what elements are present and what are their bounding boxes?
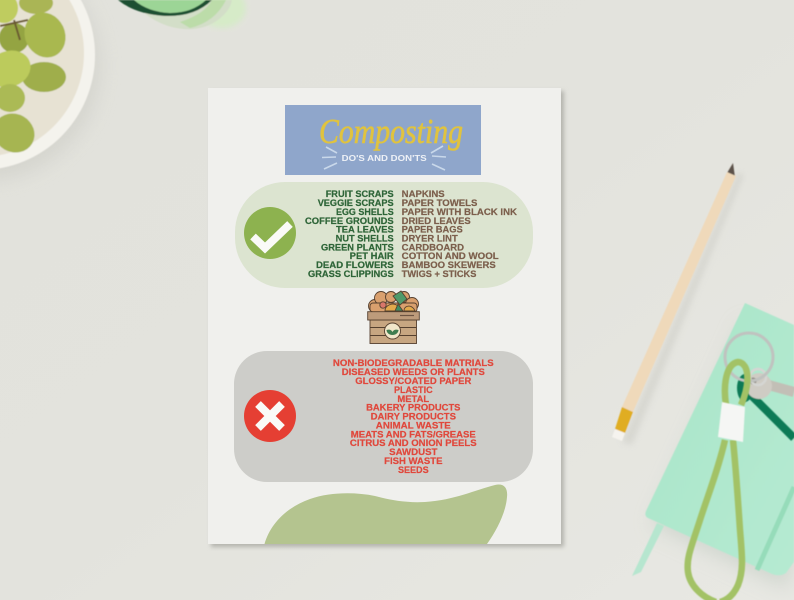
panel: compostable items xyxy=(235,182,533,288)
brown materials list: DRIED LEAVES xyxy=(402,216,471,226)
green materials list: FRUIT SCRAPS xyxy=(326,189,394,199)
red materials list: DAIRY PRODUCTS xyxy=(371,412,456,422)
sparkle lines xyxy=(322,146,446,170)
red materials list: PLASTIC xyxy=(394,385,433,395)
pencil xyxy=(612,163,744,445)
brown materials list: COTTON AND WOOL xyxy=(402,251,499,261)
brown materials list: CARDBOARD xyxy=(402,242,464,252)
red materials list: BAKERY PRODUCTS xyxy=(366,403,460,413)
green materials list: COFFEE GROUNDS xyxy=(305,216,394,226)
green materials list: DEAD FLOWERS xyxy=(316,260,394,270)
paper shadow xyxy=(211,91,564,547)
green blob decoration xyxy=(264,485,507,544)
icon: compost crate xyxy=(368,291,419,344)
paper sheet xyxy=(208,88,561,544)
icon: cross mark xyxy=(244,390,296,442)
red materials list: NON-BIODEGRADABLE MATRIALS xyxy=(333,358,494,368)
cord sleeve xyxy=(718,402,745,442)
brown materials list: TWIGS + STICKS xyxy=(402,269,476,279)
red materials list: MEATS AND FATS/GREASE xyxy=(351,429,476,439)
green materials list: GREEN PLANTS xyxy=(321,242,394,252)
green materials list: PET HAIR xyxy=(350,251,394,261)
bowl of grapes xyxy=(0,0,100,180)
green materials list: TEA LEAVES xyxy=(336,225,394,235)
red materials list: ANIMAL WASTE xyxy=(376,420,451,430)
icon: check mark xyxy=(244,207,296,259)
notebook xyxy=(632,303,794,590)
subtitle: DO'S AND DON'TS xyxy=(342,153,427,163)
panel: non-compostable items xyxy=(234,351,533,482)
header banner xyxy=(285,105,481,175)
green materials list: VEGGIE SCRAPS xyxy=(318,198,394,208)
brown materials list: PAPER WITH BLACK INK xyxy=(402,207,517,217)
green materials list: GRASS CLIPPINGS xyxy=(308,269,394,279)
brown materials list: DRYER LINT xyxy=(402,234,458,244)
brown materials list: NAPKINS xyxy=(402,189,445,199)
red materials list: DISEASED WEEDS OR PLANTS xyxy=(342,367,485,377)
red materials list: GLOSSY/COATED PAPER xyxy=(355,376,472,386)
lanyard cord xyxy=(688,362,747,600)
drinking glass xyxy=(118,0,246,29)
red materials list: FISH WASTE xyxy=(384,456,442,466)
red materials list: SAWDUST xyxy=(389,447,438,457)
keys xyxy=(737,369,794,438)
red materials list: METAL xyxy=(397,394,430,404)
brown materials list: PAPER BAGS xyxy=(402,225,463,235)
brown materials list: PAPER TOWELS xyxy=(402,198,477,208)
green materials list: NUT SHELLS xyxy=(336,234,394,244)
green materials list: EGG SHELLS xyxy=(336,207,394,217)
brown materials list xyxy=(402,189,517,279)
green materials list xyxy=(305,189,394,279)
key ring xyxy=(725,333,773,381)
red materials list: SEEDS xyxy=(398,465,429,475)
red materials list xyxy=(333,358,494,475)
title: Composting xyxy=(319,112,463,151)
red materials list: CITRUS AND ONION PEELS xyxy=(350,438,477,448)
brown materials list: BAMBOO SKEWERS xyxy=(402,260,496,270)
